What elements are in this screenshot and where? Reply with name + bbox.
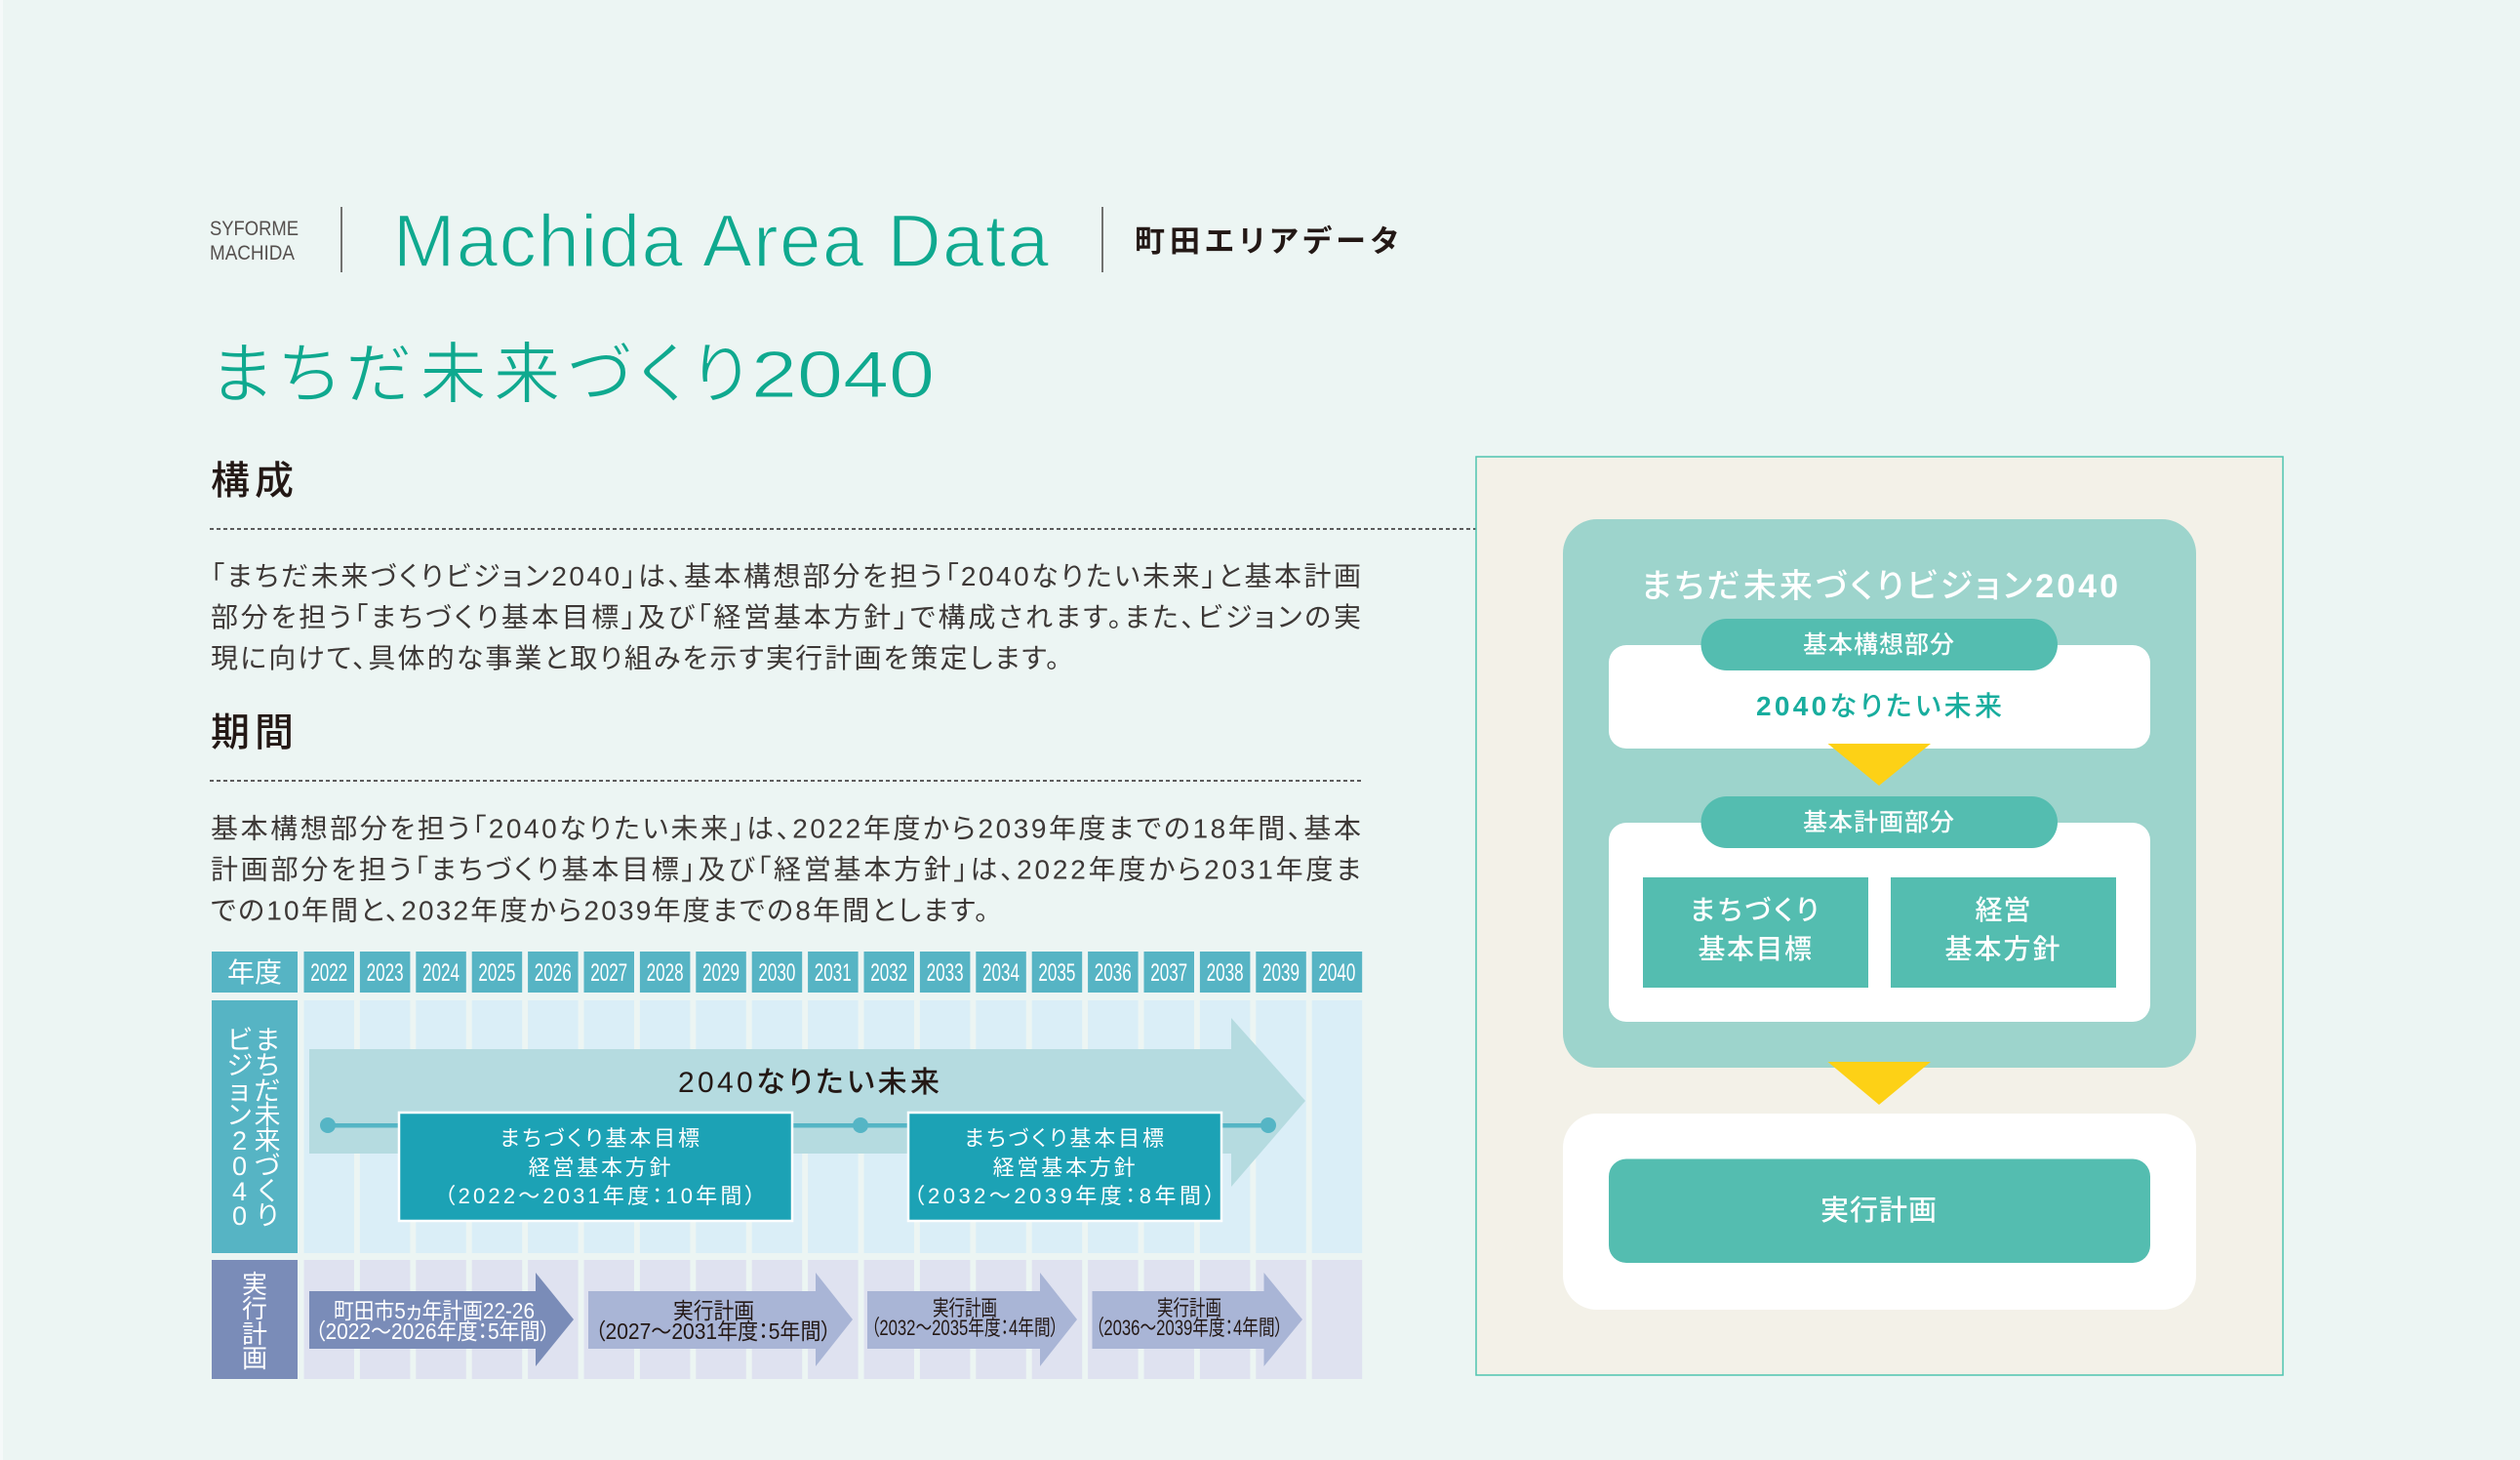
panel: vision group [1563, 519, 2196, 1068]
year header cells [304, 952, 1362, 993]
text block: period description [211, 814, 1361, 925]
arrow: execution plan 2027-2031 [588, 1273, 853, 1366]
arrow: execution plan 2032-2035: （2032～2035年度：4年間） [871, 1316, 1059, 1340]
year header cells: 2024 [422, 959, 460, 987]
execution row column backgrounds [304, 1260, 1362, 1379]
header: brand label: SYFORME [210, 218, 299, 240]
box: second period plan: まちづくり基本目標 [964, 1126, 1167, 1151]
arrow: 2040 vision: 2040なりたい未来 [678, 1067, 940, 1099]
box: town goals: まちづくり [1690, 895, 1821, 925]
text block: period description: での10年間と、2032年度から2039年度までの8年間とします。 [211, 896, 988, 925]
box: first period plan: まちづくり基本目標 [500, 1126, 702, 1151]
year header label [212, 952, 298, 993]
arrow: execution plan 2027-2031: （2027～2031年度：5年間） [595, 1318, 831, 1344]
arrow: execution plan 2027-2031: 実行計画 [673, 1298, 754, 1323]
year header cells: 2039 [1262, 959, 1300, 987]
year header cells: 2035 [1038, 959, 1075, 987]
row label: vision: ビジョン2040 [226, 1026, 253, 1231]
arrow: five-year plan 2022-2026: （2022～2026年度：5年間） [315, 1318, 550, 1344]
box: management policy: 経営 [1975, 895, 2032, 925]
box: management policy [1891, 877, 2116, 988]
title: 2040 [751, 338, 935, 412]
year header cells: 2027 [590, 959, 627, 987]
header: brand label: MACHIDA [210, 242, 295, 264]
panel: execution group [1563, 1114, 2196, 1310]
box: first period plan: 経営基本方針 [529, 1156, 673, 1180]
arrow: 2040 vision [309, 1018, 1305, 1187]
text block: period description: 基本構想部分を担う「2040なりたい未来」は、2022年度から2039年度までの18年間、基本 [211, 814, 1361, 843]
arrow: five-year plan 2022-2026 [309, 1273, 574, 1366]
year header cells: 2031 [815, 959, 852, 987]
year header cells: 2038 [1207, 959, 1244, 987]
year header cells: 2023 [367, 959, 404, 987]
heading: Machida Area Data: Machida Area Data [393, 200, 1050, 283]
heading: Japanese section name: 町田エリアデータ [1135, 224, 1398, 259]
text block: composition description: 部分を担う「まちづくり基本目標」及び「経営基本方針」で構成されます。また、ビジョンの実 [211, 602, 1361, 632]
card: basic concept [1609, 619, 2150, 749]
row label: vision: まちだ未来づくり [254, 1026, 281, 1231]
box: second period plan: （2032～2039年度：8年間） [913, 1184, 1216, 1208]
year header label: 年度 [227, 957, 282, 988]
year header cells: 2025 [478, 959, 515, 987]
card: basic concept: 基本構想部分 [1803, 631, 1955, 659]
text block: composition description: 現に向けて、具体的な事業と取り組みを示す実行計画を策定します。 [211, 643, 1060, 673]
box: town goals [1643, 877, 1868, 988]
year header cells: 2040 [1318, 959, 1355, 987]
box: town goals: 基本目標 [1698, 934, 1814, 964]
timeline chart [212, 952, 1362, 1379]
box: first period plan: （2022～2031年度：10年間） [445, 1184, 755, 1208]
panel: execution group: 実行計画 [1820, 1195, 1938, 1227]
heading: period: 期間 [211, 711, 294, 754]
year header cells: 2033 [927, 959, 964, 987]
year header cells: 2029 [702, 959, 740, 987]
card: basic plan: 基本計画部分 [1803, 809, 1955, 836]
text block: composition description: 「まちだ未来づくりビジョン2040」は、基本構想部分を担う「2040なりたい未来」と基本計画 [211, 561, 1361, 591]
arrow: yellow down 2 [1828, 1062, 1931, 1105]
arrow: yellow down 1 [1828, 744, 1931, 786]
year header cells: 2026 [535, 959, 572, 987]
box: first period plan [399, 1113, 792, 1221]
title: まちだ未来づくり [211, 338, 747, 412]
panel: structure diagram [1476, 457, 2283, 1375]
vision row column backgrounds [304, 1000, 1362, 1253]
header: brand label [210, 218, 299, 264]
arrow: execution plan 2032-2035 [867, 1273, 1077, 1366]
text block: period description: 計画部分を担う「まちづくり基本目標」及び「経営基本方針」は、2022年度から2031年度ま [211, 855, 1361, 884]
year header cells: 2037 [1150, 959, 1187, 987]
heading: composition: 構成 [211, 460, 294, 503]
row label: execution plan [212, 1260, 298, 1379]
card: basic concept: 2040なりたい未来 [1756, 691, 2002, 721]
year header cells: 2034 [982, 959, 1020, 987]
box: second period plan [908, 1113, 1221, 1221]
vision group title: まちだ未来づくりビジョン2040 [1641, 568, 2118, 605]
year header cells: 2028 [647, 959, 684, 987]
card: basic plan [1609, 796, 2150, 1022]
arrow: five-year plan 2022-2026: 町田市5ヵ年計画22-26 [334, 1298, 535, 1323]
year header cells: 2036 [1095, 959, 1132, 987]
year header cells: 2030 [758, 959, 795, 987]
text block: composition description [211, 561, 1361, 673]
row label: vision [212, 1000, 298, 1253]
box: second period plan: 経営基本方針 [993, 1156, 1138, 1180]
arrow: execution plan 2036-2039 [1093, 1273, 1302, 1366]
year header cells: 2032 [870, 959, 907, 987]
arrow: execution plan 2036-2039: 実行計画 [1157, 1296, 1221, 1320]
box: management policy: 基本方針 [1944, 934, 2062, 964]
row label: execution plan: 実行計画 [242, 1270, 267, 1373]
year header cells: 2022 [310, 959, 347, 987]
timeline line with dots [320, 1117, 1276, 1133]
arrow: execution plan 2032-2035: 実行計画 [933, 1296, 997, 1320]
arrow: execution plan 2036-2039: （2036～2039年度：4年間） [1096, 1316, 1283, 1340]
